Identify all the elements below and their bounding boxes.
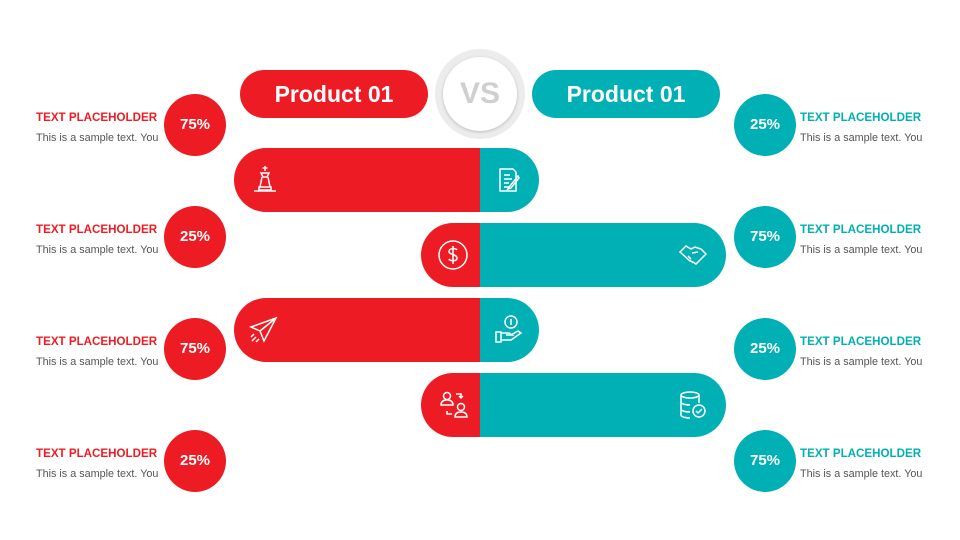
left item 3: This is a sample text. You — [36, 356, 158, 368]
VS circle — [435, 49, 525, 139]
right item 2: 75% — [750, 228, 780, 245]
bar row 1 — [234, 148, 539, 212]
right item 3: 25% — [750, 340, 780, 357]
icon: dollar coin — [438, 240, 468, 270]
left item 3: TEXT PLACEHOLDER — [36, 335, 157, 348]
right item 3: TEXT PLACEHOLDER — [800, 335, 921, 348]
VS circle: VS — [460, 77, 500, 110]
right item 4: 75% — [750, 452, 780, 469]
header: product right — [532, 70, 720, 118]
left item 2 — [36, 206, 226, 268]
left item 4: 25% — [180, 452, 210, 469]
bar row 4 — [421, 373, 726, 437]
right items — [734, 94, 922, 156]
left item 2: TEXT PLACEHOLDER — [36, 223, 157, 236]
icon: paper plane — [249, 316, 278, 343]
right item 4: This is a sample text. You — [800, 468, 922, 480]
right item 3 — [734, 318, 922, 380]
right item 2: TEXT PLACEHOLDER — [800, 223, 921, 236]
right item 2 — [734, 206, 922, 268]
left item 2: This is a sample text. You — [36, 244, 158, 256]
left items: TEXT PLACEHOLDER — [36, 111, 157, 124]
left item 3 — [36, 318, 226, 380]
icon: document pen — [499, 168, 520, 192]
left item 4: This is a sample text. You — [36, 468, 158, 480]
header: product right: Product 01 — [567, 81, 685, 107]
icon: hand coin — [495, 315, 522, 343]
left item 3: 75% — [180, 340, 210, 357]
icon: database check — [680, 391, 706, 419]
right item 4 — [734, 430, 922, 492]
left items: 75% — [180, 116, 210, 133]
left item 4: TEXT PLACEHOLDER — [36, 447, 157, 460]
right item 4: TEXT PLACEHOLDER — [800, 447, 921, 460]
header: product left: Product 01 — [275, 81, 393, 107]
icon: chess king — [254, 166, 276, 192]
right item 3: This is a sample text. You — [800, 356, 922, 368]
bar row 3 — [234, 298, 539, 362]
left items: This is a sample text. You — [36, 132, 158, 144]
right items: 25% — [750, 116, 780, 133]
right items: TEXT PLACEHOLDER — [800, 111, 921, 124]
bar row 2 — [421, 223, 726, 287]
icon: handshake — [679, 245, 707, 265]
left item 2: 25% — [180, 228, 210, 245]
header: product left — [240, 70, 428, 118]
right items: This is a sample text. You — [800, 132, 922, 144]
icon: people exchange — [440, 392, 468, 418]
right item 2: This is a sample text. You — [800, 244, 922, 256]
left item 4 — [36, 430, 226, 492]
left items — [36, 94, 226, 156]
